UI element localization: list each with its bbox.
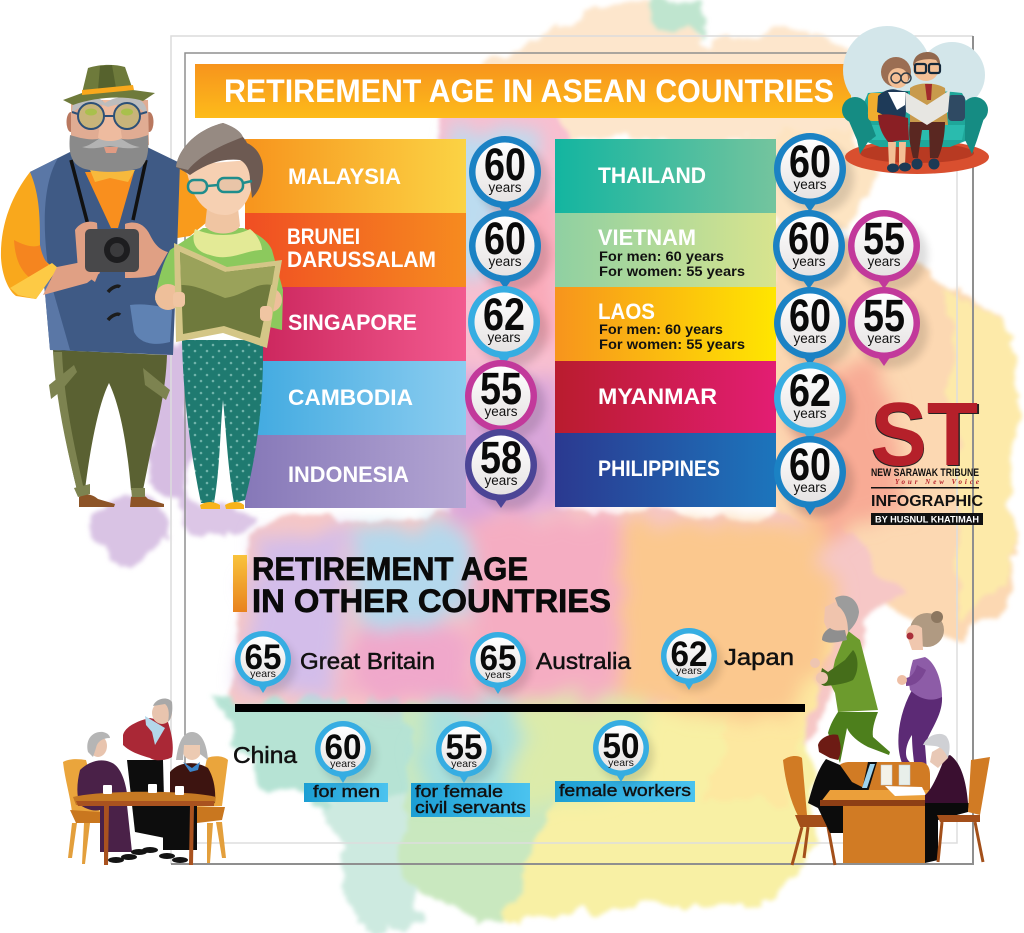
badge: Indonesia 58 <box>465 429 545 510</box>
entry: Japan 62: Japan <box>724 644 794 670</box>
entry: China female civil servants 55: 55 <box>446 728 482 767</box>
row: Vietnam: VIETNAM <box>598 225 696 250</box>
badge: Indonesia 58: 58 <box>480 432 522 483</box>
row: Vietnam <box>555 213 776 287</box>
badge: Indonesia 58: years <box>484 473 518 488</box>
title banner: RETIREMENT AGE IN ASEAN COUNTRIES <box>224 73 834 109</box>
entry: Australia 65 <box>470 632 631 695</box>
row: Malaysia <box>245 139 466 213</box>
badge: Thailand 60 <box>774 133 854 214</box>
row: Brunei Darussalam: DARUSSALAM <box>287 247 436 272</box>
entry: China men 60 <box>304 721 388 802</box>
badge: Singapore 62: 62 <box>483 289 525 340</box>
entry: Great Britain 65: 65 <box>244 638 282 677</box>
badge: Laos women 55 <box>848 287 928 368</box>
entry: Australia 65: years <box>485 669 511 681</box>
badge: Brunei 60: 60 <box>484 213 526 264</box>
row: Laos <box>555 287 776 361</box>
entry: Japan 62: 62 <box>670 635 708 674</box>
divider bar <box>235 704 805 712</box>
row: Vietnam: For women: 55 years <box>599 264 745 279</box>
badge: Vietnam women 55: 55 <box>863 213 905 264</box>
logo: New Sarawak Tribune: BY HUSNUL KHATIMAH <box>875 514 979 526</box>
row: Philippines: PHILIPPINES <box>598 456 720 481</box>
entry: Australia 65: Australia <box>536 648 631 674</box>
heading: other countries <box>233 551 611 619</box>
badge: Thailand 60: years <box>793 177 827 192</box>
row: Indonesia <box>245 435 466 508</box>
row: Brunei Darussalam <box>245 213 466 287</box>
row: Singapore <box>245 287 466 361</box>
badge: Philippines 60: 60 <box>789 439 831 490</box>
logo: New Sarawak Tribune: ST <box>871 385 978 485</box>
row: Myanmar <box>555 361 776 433</box>
logo: New Sarawak Tribune: Your New Voice <box>895 478 979 486</box>
badge: Myanmar 62: years <box>793 406 827 421</box>
badge: Malaysia 60: years <box>488 180 522 195</box>
panel: ASEAN right column <box>555 139 776 507</box>
row: Laos: LAOS <box>598 299 655 324</box>
logo: New Sarawak Tribune: INFOGRAPHIC <box>871 493 983 510</box>
row: Thailand <box>555 139 776 213</box>
entry: Japan 62 <box>661 628 794 691</box>
illustration: couple on sofa <box>842 26 989 174</box>
row: Cambodia <box>245 361 466 435</box>
badge: Malaysia 60 <box>469 136 549 217</box>
badge: Cambodia 55: years <box>484 404 518 419</box>
panel: ASEAN left column <box>245 139 466 508</box>
row: Philippines <box>555 433 776 507</box>
badge: Philippines 60: years <box>793 480 827 495</box>
logo: New Sarawak Tribune: NEW SARAWAK TRIBUNE <box>871 467 979 479</box>
badge: Laos men 60 <box>774 287 854 368</box>
badge: Singapore 62: years <box>487 330 521 345</box>
heading: other countries: IN OTHER COUNTRIES <box>252 583 611 619</box>
badge: Philippines 60 <box>774 436 854 517</box>
row: Laos: For women: 55 years <box>599 337 745 352</box>
illustration: women at tea table <box>63 699 228 865</box>
outer frame <box>171 36 973 864</box>
row: Vietnam: For men: 60 years <box>599 249 724 264</box>
row: Thailand: THAILAND <box>598 163 706 188</box>
badge: Vietnam women 55 <box>848 210 928 291</box>
row: Cambodia: CAMBODIA <box>288 385 413 410</box>
badge: Cambodia 55 <box>465 360 545 441</box>
label: China: China <box>233 742 297 768</box>
badge: Malaysia 60: 60 <box>484 139 526 190</box>
badge: Myanmar 62 <box>774 362 854 443</box>
badge: Thailand 60: 60 <box>789 136 831 187</box>
entry: China female workers 50: years <box>608 757 634 769</box>
entry: China men 60: for men <box>313 782 380 801</box>
entry: Australia 65: 65 <box>480 639 516 678</box>
badge: Laos men 60: years <box>793 331 827 346</box>
row: Myanmar: MYANMAR <box>598 384 717 409</box>
badge: Myanmar 62: 62 <box>789 365 831 416</box>
entry: China female civil servants 55: years <box>451 758 477 770</box>
badge: Brunei 60: years <box>488 254 522 269</box>
entry: China female civil servants 55: for female <box>415 782 503 801</box>
entry: China men 60: 60 <box>324 728 362 767</box>
entry: Great Britain 65: Great Britain <box>300 648 435 674</box>
entry: Japan 62: years <box>676 665 702 677</box>
row: Singapore: SINGAPORE <box>288 310 417 335</box>
badge: Cambodia 55: 55 <box>480 363 522 414</box>
badge: Vietnam men 60: years <box>792 254 826 269</box>
title banner <box>195 64 851 118</box>
heading: other countries: RETIREMENT AGE <box>252 551 528 587</box>
logo: New Sarawak Tribune: ST <box>870 386 980 486</box>
entry: China female civil servants 55 <box>411 721 530 817</box>
entry: China female workers 50: 50 <box>602 727 640 766</box>
badge: Laos men 60: 60 <box>789 290 831 341</box>
badge: Laos women 55: 55 <box>863 290 905 341</box>
entry: Great Britain 65 <box>235 631 435 694</box>
badge: Vietnam women 55: years <box>867 254 901 269</box>
illustration: joggers and office desk <box>783 596 990 865</box>
row: Malaysia: MALAYSIA <box>288 164 401 189</box>
entry: Great Britain 65: years <box>250 668 276 680</box>
illustration: woman with newspaper <box>155 123 283 509</box>
badge: Singapore 62 <box>468 286 548 367</box>
row: Laos: For men: 60 years <box>599 322 723 337</box>
entry: China female workers 50 <box>555 720 695 802</box>
badge: Vietnam men 60: 60 <box>788 213 830 264</box>
row: Brunei Darussalam: BRUNEI <box>287 224 360 249</box>
entry: China female civil servants 55: civil servants <box>415 798 526 817</box>
badge: Vietnam men 60 <box>773 210 853 291</box>
entry: China female workers 50: female workers <box>559 781 691 800</box>
illustration: man with camera <box>1 65 212 507</box>
badge: Laos women 55: years <box>867 331 901 346</box>
row: Indonesia: INDONESIA <box>288 462 409 487</box>
badge: Brunei 60 <box>469 210 549 291</box>
entry: China men 60: years <box>330 758 356 770</box>
